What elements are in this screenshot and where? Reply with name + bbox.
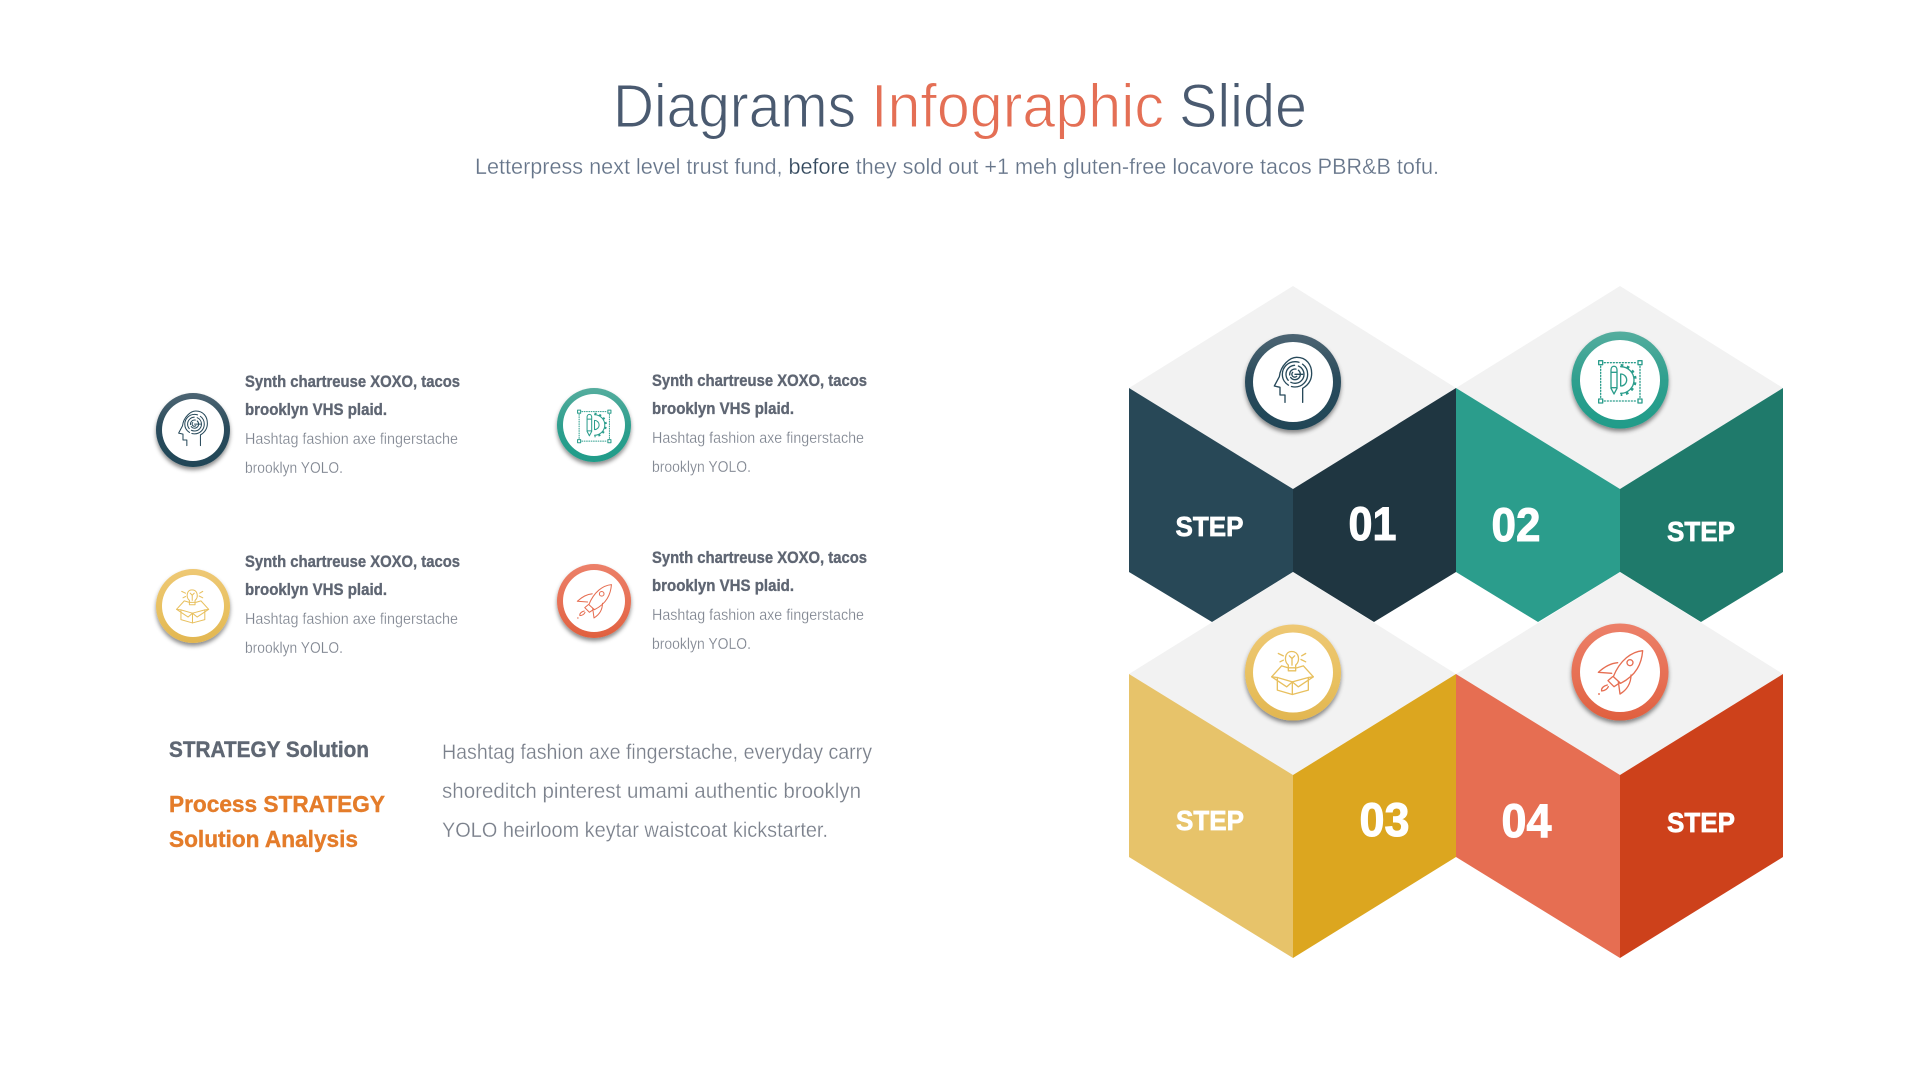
step 1 hexagon: [1129, 286, 1456, 622]
process heading: [169, 791, 385, 852]
item 3 text: brooklyn VHS plaid.: [245, 581, 387, 599]
step 1 hexagon: STEP: [1176, 511, 1244, 542]
step 4 hexagon: 04: [1502, 794, 1552, 847]
icon: head maze badge: [156, 393, 230, 467]
paragraph: Hashtag fashion axe fingerstache, everyday carry: [442, 740, 872, 764]
icon: head maze: [1245, 334, 1341, 430]
item 4 text: Hashtag fashion axe fingerstache: [652, 607, 864, 624]
item 4: [557, 549, 867, 653]
step 3 hexagon: 03: [1360, 793, 1410, 846]
step 2 hexagon: 02: [1492, 498, 1540, 551]
step 3 hexagon: STEP: [1176, 805, 1244, 836]
step 1 hexagon: 01: [1348, 497, 1396, 550]
step 3 hexagon: [1129, 572, 1456, 958]
item 1 text: brooklyn VHS plaid.: [245, 401, 387, 419]
paragraph: YOLO heirloom keytar waistcoat kickstarter.: [442, 818, 828, 842]
icon: rocket: [1572, 624, 1668, 720]
paragraph: shoreditch pinterest umami authentic brooklyn: [442, 779, 861, 803]
item 4 text: Synth chartreuse XOXO, tacos: [652, 549, 867, 567]
item 4 text: brooklyn YOLO.: [652, 636, 751, 653]
item 1: [156, 373, 460, 477]
item 2 text: brooklyn YOLO.: [652, 459, 751, 476]
item 4 text: [652, 549, 867, 653]
step 2 hexagon: [1456, 286, 1783, 622]
subtitle: Letterpress next level trust fund, before they sold out +1 meh gluten-free locavore tacos PBR&B tofu.: [475, 154, 1439, 179]
item 3 text: Synth chartreuse XOXO, tacos: [245, 553, 460, 571]
process heading: Process STRATEGY: [169, 791, 385, 817]
process heading: Solution Analysis: [169, 826, 358, 852]
item 4 text: brooklyn VHS plaid.: [652, 577, 794, 595]
icon: rocket badge: [557, 564, 631, 638]
icon: design gear: [1572, 332, 1668, 428]
item 3 text: Hashtag fashion axe fingerstache: [245, 611, 458, 628]
item 3 text: [245, 553, 460, 657]
item 2 text: brooklyn VHS plaid.: [652, 400, 794, 418]
item 2 text: Synth chartreuse XOXO, tacos: [652, 372, 867, 390]
step 4 hexagon: [1456, 572, 1783, 958]
item 1 text: brooklyn YOLO.: [245, 460, 343, 477]
item 2: [557, 372, 867, 476]
icon: idea box badge: [156, 569, 230, 643]
title: [613, 72, 1307, 140]
paragraph: [442, 740, 872, 842]
step 4 hexagon: STEP: [1667, 807, 1735, 838]
item 2 text: [652, 372, 867, 476]
icon: idea box: [1245, 624, 1341, 720]
item 1 text: Synth chartreuse XOXO, tacos: [245, 373, 460, 391]
strategy heading: STRATEGY Solution: [169, 737, 369, 762]
item 1 text: [245, 373, 460, 477]
item 3: [156, 553, 460, 657]
item 2 text: Hashtag fashion axe fingerstache: [652, 430, 864, 447]
icon: design gear badge: [557, 388, 631, 462]
title: Infographic: [871, 72, 1164, 140]
title: Slide: [1179, 72, 1307, 140]
item 3 text: brooklyn YOLO.: [245, 640, 343, 657]
item 1 text: Hashtag fashion axe fingerstache: [245, 431, 458, 448]
step 2 hexagon: STEP: [1667, 516, 1735, 547]
title: Diagrams: [613, 72, 856, 140]
